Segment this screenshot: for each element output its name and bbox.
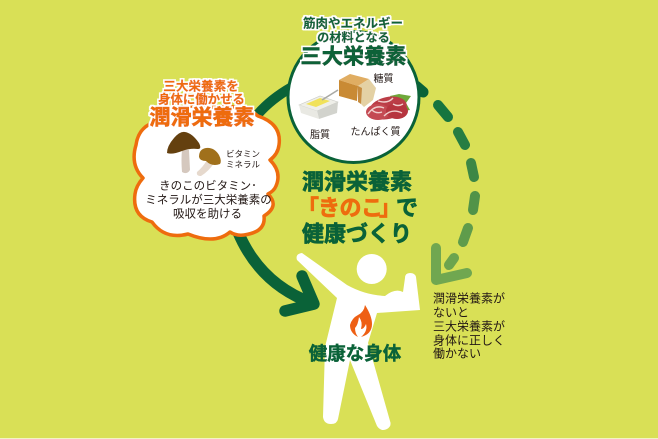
arrow: solid arc to healthy body [238,232,314,311]
icon: bread [339,74,376,107]
panel: three major nutrients circle [288,32,419,162]
label: fat: 脂質 [310,128,330,141]
text: without lubricating nutrients [433,290,505,360]
text: without lubricating nutrients: 潤滑栄養素が [433,290,505,306]
heading: makes nutrients work: 潤滑栄養素 [150,106,254,130]
heading: material for muscle and energy: 三大栄養素 [301,44,406,68]
heading: makes nutrients work: 三大栄養素を [163,78,239,94]
text: without lubricating nutrients: ないと [433,306,469,320]
heading: center title [297,170,418,246]
heading: material for muscle and energy [301,16,406,68]
label: healthy body: 健康な身体 [309,343,402,364]
icon: small mushroom [197,148,221,176]
label: vitamin and mineral: ミネラル [226,160,260,170]
arrow: cycle arc from nutrients to the cloud [258,87,292,114]
text: mushroom vitamins help absorption [145,180,272,220]
text: without lubricating nutrients: 身体に正しく [433,332,505,348]
heading: center title: 潤滑栄養素 [302,170,412,194]
label: vitamin and mineral [226,149,260,170]
icon: meat with leaf [366,93,411,123]
heading: material for muscle and energy: の材料となる [317,30,390,44]
text: mushroom vitamins help absorption: 吸収を助ける [173,206,242,220]
icon: large mushroom [167,132,200,173]
text: mushroom vitamins help absorption: ミネラルが三大栄養素の [145,192,272,206]
label: protein: たんぱく質 [350,125,400,138]
heading: makes nutrients work: 身体に働かせる [158,92,245,106]
heading: center title: 健康づくり [302,222,412,246]
arrow: dashed arc without lubricating nutrients [416,86,475,280]
icon: butter [299,90,338,119]
text: without lubricating nutrients: 働かない [433,346,481,360]
heading: material for muscle and energy: 筋肉やエネルギー [303,16,403,30]
label: sugar: 糖質 [374,72,394,85]
icon: white human figure [297,253,420,430]
text: mushroom vitamins help absorption: きのこのビタミン･ [159,180,257,192]
heading: makes nutrients work [150,78,254,130]
icon: flame [350,305,372,337]
heading: center title: 「きのこ」で [297,196,418,220]
label: vitamin and mineral: ビタミン [226,149,260,159]
panel: lubricating nutrients cloud [134,106,279,239]
text: without lubricating nutrients: 三大栄養素が [433,318,505,334]
